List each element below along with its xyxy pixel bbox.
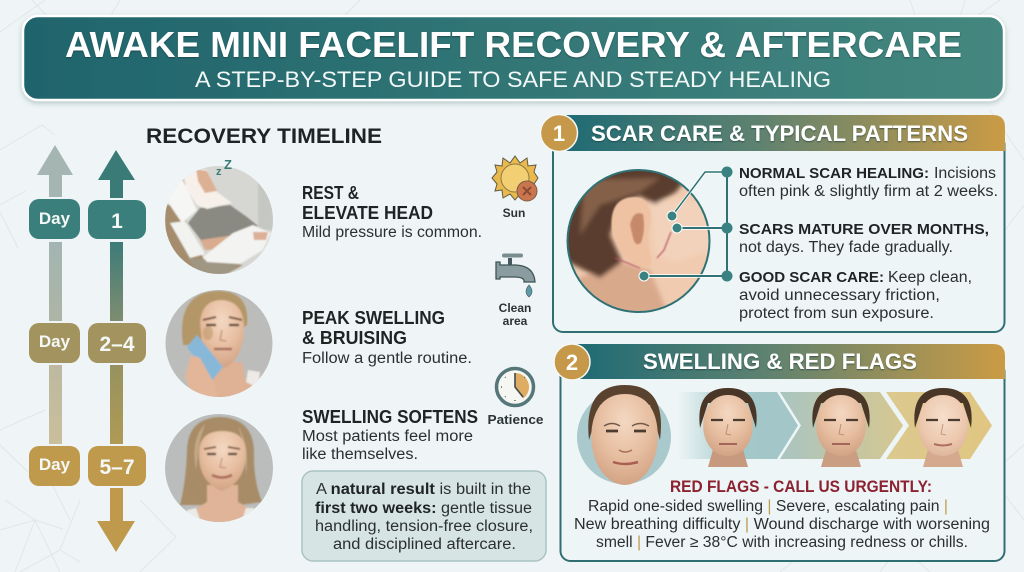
text: swelling softens: SWELLING SOFTENS bbox=[302, 407, 478, 427]
face: swollen large bbox=[577, 385, 671, 485]
pill: day 2 bbox=[29, 323, 80, 363]
label: sun: Sun bbox=[503, 206, 525, 220]
label: clean area: Clean bbox=[499, 301, 531, 315]
callout: natural result: and disciplined aftercare. bbox=[333, 536, 516, 553]
text: swelling softens: Most patients feel more bbox=[302, 428, 473, 445]
timeline: day labels arrow bbox=[29, 145, 80, 486]
red flags list bbox=[574, 498, 990, 551]
scar callout connectors bbox=[639, 166, 732, 282]
text: rest and elevate head: ELEVATE HEAD bbox=[302, 203, 433, 223]
pill: day 3: Day bbox=[39, 455, 71, 474]
pill: 1 bbox=[88, 200, 146, 239]
panel 2 header bar bbox=[572, 344, 1005, 379]
panel 1 header bar bbox=[559, 115, 1005, 151]
badge 2 bbox=[554, 344, 590, 380]
photo: patient resting with head elevated bbox=[162, 157, 273, 276]
icon: clock bbox=[496, 368, 534, 406]
icon: sun with cross bbox=[492, 156, 538, 201]
pill: day 1: Day bbox=[39, 209, 71, 228]
photo: woman with cold compress bbox=[165, 289, 273, 400]
text: normal scar healing: often pink & slightly firm at 2 weeks. bbox=[739, 183, 998, 200]
text: swelling softens: like themselves. bbox=[302, 446, 418, 463]
pill: 2–4: 2–4 bbox=[99, 333, 135, 356]
pill: day 3 bbox=[29, 446, 80, 486]
pill: 5–7: 5–7 bbox=[99, 456, 135, 479]
face: stage 3 bbox=[812, 388, 870, 467]
subtitle: A STEP-BY-STEP GUIDE TO SAFE AND STEADY HEALING bbox=[195, 67, 831, 92]
label: clean area: area bbox=[503, 314, 528, 328]
callout: natural result: A natural result is built in the bbox=[316, 481, 531, 498]
text: peak swelling and bruising: PEAK SWELLING bbox=[302, 308, 445, 328]
text: rest and elevate head: Mild pressure is common. bbox=[302, 224, 482, 241]
text: peak swelling and bruising: & BRUISING bbox=[302, 328, 407, 348]
photo: smiling recovered woman bbox=[165, 414, 273, 526]
text: swelling softens bbox=[302, 407, 478, 463]
timeline: range arrow bbox=[88, 150, 146, 552]
text: peak swelling and bruising bbox=[302, 308, 472, 367]
text: normal scar healing bbox=[739, 165, 998, 200]
healing progress chevrons bbox=[677, 392, 992, 459]
badge 1 bbox=[540, 114, 578, 152]
red flags heading: RED FLAGS - CALL US URGENTLY: bbox=[670, 478, 932, 496]
text: good scar care: GOOD SCAR CARE: bbox=[739, 269, 884, 286]
title banner bbox=[23, 16, 1004, 100]
icon: sleeping z letters: z bbox=[216, 166, 222, 178]
icon: sleeping z letters bbox=[216, 157, 232, 178]
text: normal scar healing: NORMAL SCAR HEALING: bbox=[739, 165, 929, 182]
callout: natural result: first two weeks: gentle tissue bbox=[315, 500, 532, 517]
text: good scar care: protect from sun exposure. bbox=[739, 305, 934, 322]
text: scars mature: not days. They fade gradually. bbox=[739, 239, 953, 256]
red flags list: smell | Fever ≥ 38°C with increasing redness or chills. bbox=[596, 534, 968, 551]
text: scars mature bbox=[739, 221, 989, 256]
badge 2: 2 bbox=[566, 350, 578, 375]
text: good scar care: avoid unnecessary friction, bbox=[739, 287, 940, 304]
panel 1: scar care bbox=[540, 114, 1005, 332]
callout: natural result: handling, tension-free closure, bbox=[315, 518, 533, 535]
photo: ear with scar bbox=[566, 169, 710, 313]
badge 1: 1 bbox=[553, 121, 565, 146]
label: patience: Patience bbox=[488, 413, 544, 427]
panel 1 header bar: SCAR CARE & TYPICAL PATTERNS bbox=[591, 121, 968, 146]
text: scars mature: SCARS MATURE OVER MONTHS, bbox=[739, 221, 989, 238]
text: good scar care: Keep clean, bbox=[888, 269, 972, 286]
red flags list: Rapid one-sided swelling | Severe, escalating pain | bbox=[588, 498, 948, 515]
face: stage 4 bbox=[914, 388, 972, 467]
text: rest and elevate head: REST & bbox=[302, 183, 359, 203]
pill: 5–7 bbox=[88, 446, 146, 486]
label: clean area bbox=[499, 301, 531, 328]
main title: AWAKE MINI FACELIFT RECOVERY & AFTERCARE bbox=[65, 24, 962, 65]
callout: natural result bbox=[302, 471, 546, 561]
panel 2 header bar: SWELLING & RED FLAGS bbox=[643, 349, 917, 374]
pill: 1: 1 bbox=[111, 210, 123, 233]
heading: recovery timeline: RECOVERY TIMELINE bbox=[146, 125, 382, 148]
pill: day 1 bbox=[29, 199, 80, 239]
icon: sleeping z letters: Z bbox=[224, 157, 232, 172]
pill: 2–4 bbox=[88, 323, 146, 363]
icon: water tap with drop bbox=[496, 256, 535, 297]
face: stage 2 bbox=[699, 388, 757, 467]
text: peak swelling and bruising: Follow a gentle routine. bbox=[302, 350, 472, 367]
panel 2: swelling and red flags bbox=[554, 344, 1005, 561]
text: normal scar healing: Incisions bbox=[934, 165, 996, 182]
red flags list: New breathing difficulty | Wound discharge with worsening bbox=[574, 516, 990, 533]
text: good scar care bbox=[739, 269, 972, 322]
pill: day 2: Day bbox=[39, 332, 71, 351]
text: rest and elevate head bbox=[302, 183, 482, 241]
